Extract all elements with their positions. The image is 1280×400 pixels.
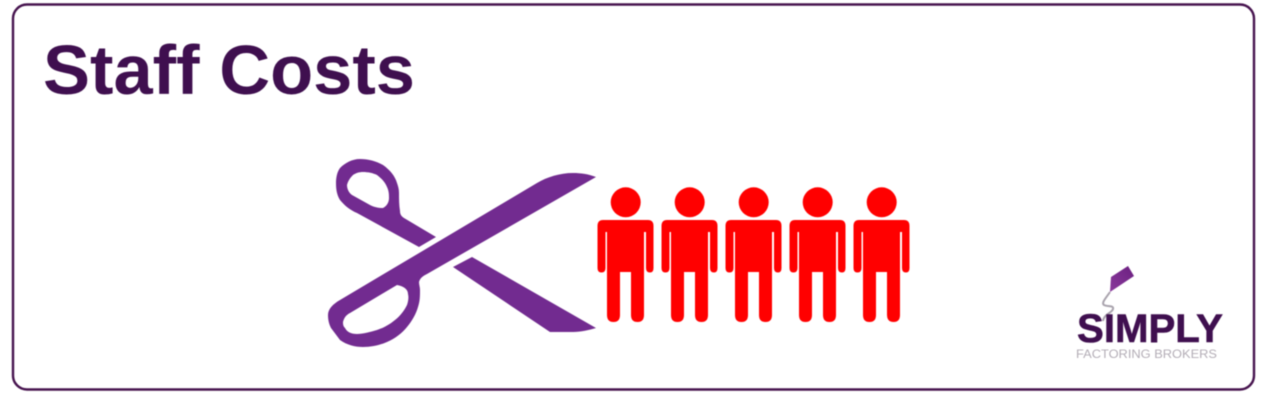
icon: row of five staff figures xyxy=(598,187,910,322)
logo wordmark: SIMPLY xyxy=(1077,307,1223,351)
person 2 xyxy=(662,187,718,322)
icon: kite xyxy=(1110,266,1134,292)
person 3 xyxy=(726,187,782,322)
person 5 xyxy=(854,187,910,322)
person 4 xyxy=(790,187,846,322)
scissors lower blade xyxy=(453,257,596,332)
icon: kite string xyxy=(1103,292,1113,321)
logo: Simply Factoring Brokers xyxy=(1076,266,1223,361)
title: Staff Costs xyxy=(43,31,415,109)
icon: scissors xyxy=(328,159,596,347)
logo tagline: FACTORING BROKERS xyxy=(1076,349,1217,361)
person 1 xyxy=(598,187,654,322)
scissors upper blade and lower handle xyxy=(328,173,596,347)
scissors upper handle xyxy=(336,159,436,247)
